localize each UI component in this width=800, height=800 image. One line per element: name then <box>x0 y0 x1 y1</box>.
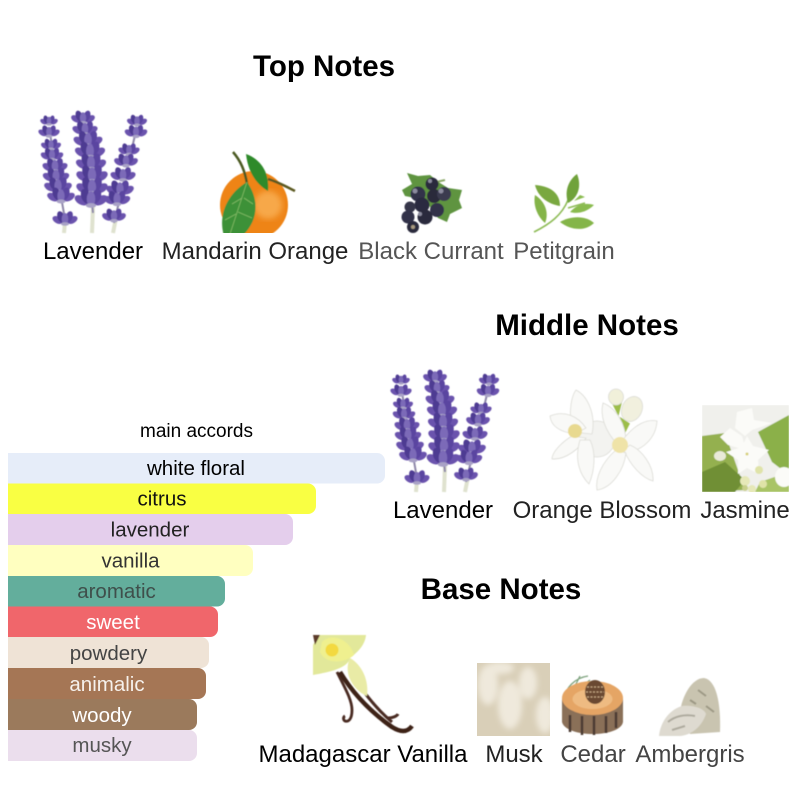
chart: main accords <box>8 421 385 761</box>
bar: lavender <box>8 514 293 545</box>
bar: vanilla: vanilla <box>101 550 160 572</box>
label: Musk: Musk <box>485 741 544 768</box>
icon: cedar <box>562 676 623 735</box>
bar: citrus: citrus <box>138 488 186 510</box>
bar: powdery: powdery <box>70 642 148 665</box>
bar: sweet: sweet <box>86 611 140 634</box>
icon: black currant <box>402 173 462 233</box>
icon: jasmine <box>702 405 793 493</box>
bar: musky: musky <box>72 734 132 757</box>
icon: petitgrain <box>534 174 594 232</box>
label: Jasmine: Jasmine <box>700 497 790 524</box>
bar: lavender: lavender <box>111 518 189 542</box>
bar: powdery <box>8 637 209 668</box>
icon: mandarin orange <box>220 152 295 239</box>
bar: animalic: animalic <box>69 673 145 696</box>
label: Lavender: Lavender <box>393 497 493 524</box>
label: Petitgrain: Petitgrain <box>513 238 615 265</box>
title: Base Notes: Base Notes <box>421 573 581 606</box>
label: Mandarin Orange: Mandarin Orange <box>162 238 348 265</box>
bar: sweet <box>8 606 218 637</box>
label: Black Currant: Black Currant <box>358 238 504 265</box>
icon: lavender (middle notes) <box>389 369 501 492</box>
title: Middle Notes: Middle Notes <box>495 309 679 342</box>
bar: musky <box>8 730 197 761</box>
bar: vanilla <box>8 545 253 576</box>
bar: aromatic: aromatic <box>77 580 156 603</box>
label: Ambergris: Ambergris <box>635 741 745 768</box>
icon: madagascar vanilla <box>313 635 412 731</box>
icon: orange blossom <box>550 389 657 490</box>
label: Madagascar Vanilla: Madagascar Vanilla <box>258 741 468 768</box>
label: Cedar: Cedar <box>560 741 626 768</box>
icon: ambergris <box>659 678 720 736</box>
bar: white floral: white floral <box>146 457 245 480</box>
chart title: main accords <box>140 421 253 442</box>
bar: woody: woody <box>71 704 132 727</box>
label: Orange Blossom: Orange Blossom <box>513 497 691 524</box>
bar: aromatic <box>8 576 225 606</box>
icon: lavender (top notes) <box>37 110 149 233</box>
title: Top Notes: Top Notes <box>253 50 395 83</box>
icon: musk <box>477 662 554 736</box>
bar: animalic <box>8 668 206 699</box>
label: Lavender: Lavender <box>43 238 143 265</box>
bar: citrus <box>8 484 316 514</box>
bar: woody <box>8 699 197 730</box>
bar: white floral <box>8 453 385 484</box>
